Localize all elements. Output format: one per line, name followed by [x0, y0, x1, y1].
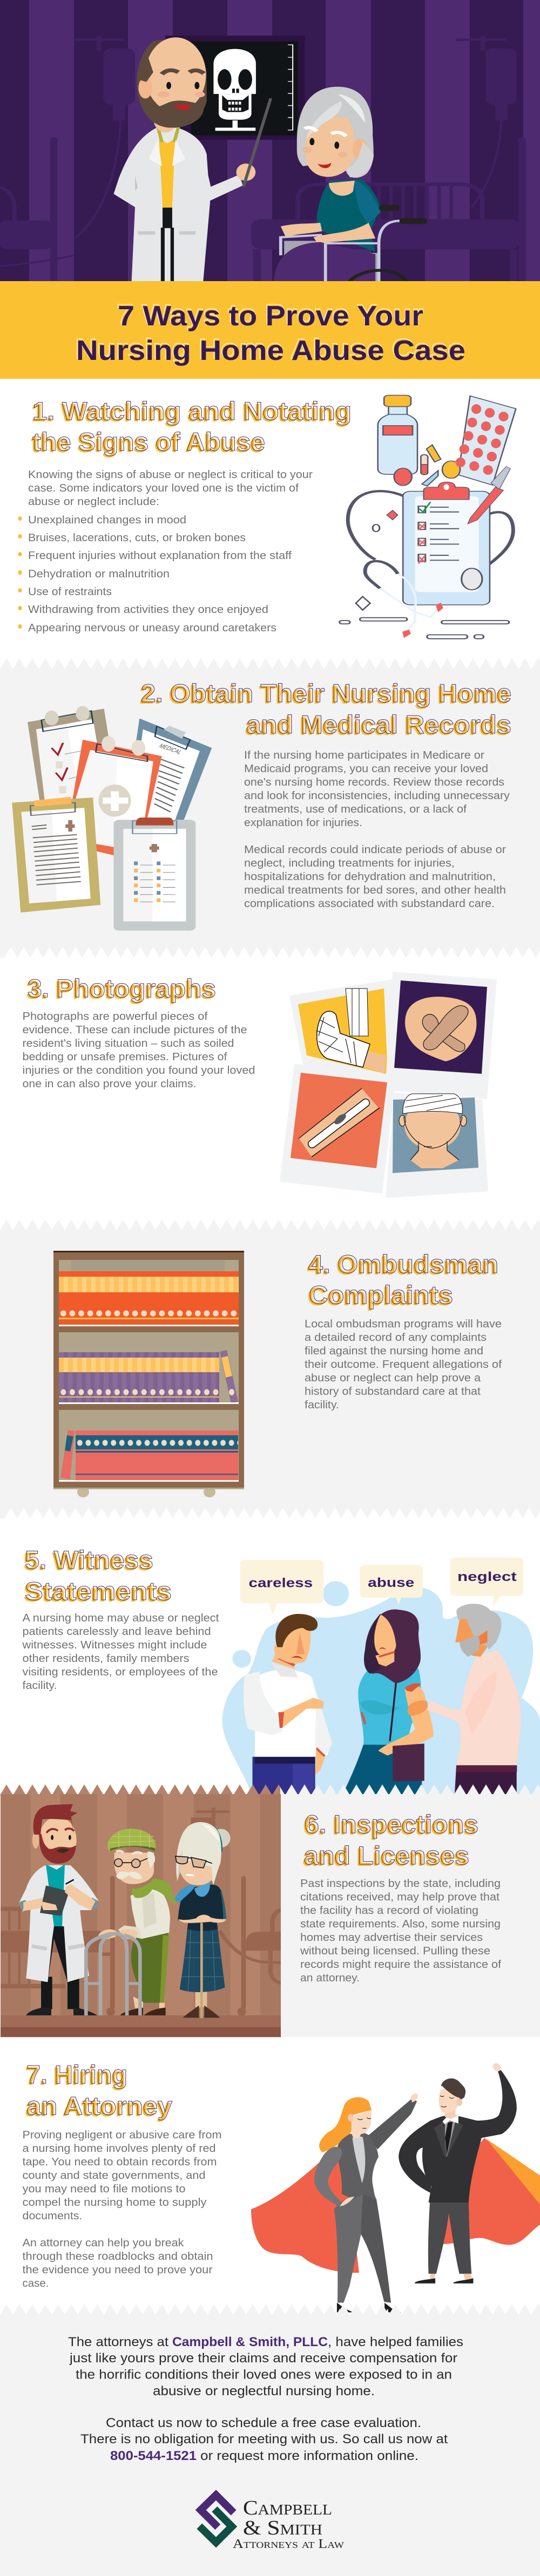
text: closing paragraph	[68, 2335, 463, 2398]
speech bubble: careless: careless	[248, 1576, 313, 1590]
elderly man with walker	[86, 1829, 176, 2015]
caped man attorney	[399, 2063, 540, 2284]
panel: closing section background	[0, 2304, 540, 2576]
text: section 3: Photographs are powerful pieces of	[23, 1010, 208, 1023]
heading: section 6: 6. Inspections	[305, 1810, 478, 1838]
panel: section 4 background	[0, 1219, 540, 1518]
text: section 4	[305, 1318, 502, 1411]
heading: section 1: the Signs of Abuse	[32, 427, 265, 456]
text: section 1 intro: abuse or neglect include:	[28, 495, 159, 508]
heading: section 1	[31, 397, 352, 458]
title banner	[0, 281, 540, 379]
illustration: medicine, clipboard, stethoscope	[340, 396, 516, 639]
text: section 4: a detailed record of any complaints	[305, 1331, 487, 1344]
illustration: bookshelf of records	[53, 1251, 244, 1497]
logo: Campbell & Smith: & Smith	[243, 2517, 322, 2539]
title banner: 7 Ways to Prove Your	[117, 299, 423, 330]
heading: section 1: the Signs of Abuse	[31, 429, 264, 458]
text: section 6: records might require the assistance of	[300, 1958, 501, 1971]
text: section 7: county and state governments, and	[23, 2169, 206, 2182]
speech bubble: neglect	[450, 1558, 523, 1606]
background bed silhouettes	[1, 1808, 281, 2016]
text: section 7: case.	[23, 2277, 49, 2289]
illustration: clipboards: MEDICAL	[157, 743, 184, 755]
text: section 5	[22, 1612, 219, 1692]
text: section 3: bedding or unsafe premises. Pictures of	[23, 1051, 227, 1063]
heading: section 4: 4. Ombudsman	[307, 1251, 497, 1280]
text: section 7: Proving negligent or abusive care from	[23, 2129, 221, 2141]
speech bubble: neglect: neglect	[457, 1570, 517, 1584]
heading: section 2: 2. Obtain Their Nursing Home	[141, 679, 511, 707]
text: section 7: the evidence you need to prove your	[23, 2264, 213, 2276]
text: call to action: or request more information online.	[200, 2449, 418, 2463]
title banner: Nursing Home Abuse Case	[75, 333, 464, 365]
text: call to action	[80, 2416, 448, 2463]
caped woman attorney	[251, 2094, 418, 2312]
heading: section 2: and Medical Records	[246, 710, 511, 739]
heading: section 3: 3. Photographs	[28, 974, 216, 1003]
elderly man witness	[408, 1604, 521, 1794]
text: section 6: state requirements. Also, some nursing	[300, 1918, 501, 1930]
text: section 1 intro	[28, 468, 313, 508]
heading: section 7: an Attorney	[25, 2093, 171, 2122]
heading: section 5	[23, 1545, 172, 1607]
text: section 2: one's nursing home records. Review those records	[244, 776, 504, 788]
text: section 2: If the nursing home participates in Medicare or	[244, 749, 484, 761]
text: section 2: complications associated with substandard care.	[244, 897, 495, 910]
elderly woman in wheelchair	[274, 87, 427, 281]
bullet list: signs of abuse: Appearing nervous or uneasy around caretakers	[28, 622, 276, 634]
heading: section 4: Complaints	[309, 1280, 453, 1309]
woman witness	[343, 1604, 501, 1794]
text: section 7: tape. You need to obtain records from	[23, 2156, 217, 2168]
heading: section 5: Statements	[23, 1578, 170, 1607]
heading: section 6	[302, 1810, 478, 1871]
text: section 5: facility.	[23, 1679, 57, 1692]
text: section 6: without being licensed. Pulling these	[300, 1945, 490, 1957]
hospital silhouettes background	[0, 36, 526, 281]
bullet list: signs of abuse: Unexplained changes in mood	[28, 514, 186, 526]
text: section 3: resident's living situation – such as soiled	[23, 1037, 234, 1050]
text: section 2: Medicaid programs, you can receive your loved	[244, 762, 488, 775]
illustration: attorney superheroes	[251, 2063, 540, 2312]
heading: section 4: 4. Ombudsman	[308, 1250, 498, 1278]
elderly woman with cane	[174, 1822, 231, 2018]
heading: section 4	[307, 1250, 498, 1311]
text: section 7	[23, 2129, 221, 2289]
panel: section 6 background	[280, 1784, 540, 2037]
text: call to action: Contact us now to schedule a free case evaluation.	[106, 2416, 421, 2430]
text: section 5: A nursing home may abuse or neglect	[23, 1612, 219, 1624]
text: section 5: visiting residents, or employees of the	[23, 1666, 218, 1678]
text: closing paragraph: Campbell & Smith, PLLC	[172, 2335, 328, 2349]
text: section 7: An attorney can help you break	[23, 2237, 184, 2249]
text: section 6	[300, 1877, 501, 1984]
text: section 2: neglect, including treatments for injuries,	[244, 857, 455, 869]
illustration: clipboards	[12, 706, 212, 931]
text: section 3: evidence. These can include pictures of the	[23, 1024, 247, 1036]
logo: Campbell & Smith: Attorneys at Law	[233, 2537, 345, 2551]
text: section 5: witnesses. Witnesses might include	[22, 1639, 207, 1651]
text: section 5: patients carelessly and leave behind	[23, 1625, 211, 1638]
text: section 4: filed against the nursing home and	[305, 1345, 483, 1357]
text: section 4: history of substandard care at that	[305, 1385, 481, 1398]
text: section 2: treatments, use of medications, or a lack of	[244, 803, 467, 815]
doctor with clipboard	[19, 1804, 99, 2015]
text: section 6: homes may advertise their services	[300, 1931, 483, 1944]
text: section 3: injuries or the condition you found your loved	[23, 1064, 255, 1076]
text: closing paragraph: , have helped families	[328, 2335, 463, 2349]
shelf 3	[59, 1410, 239, 1482]
x-ray board with skull	[165, 36, 305, 140]
doctor figure	[113, 37, 271, 281]
photo: bandaged arm	[289, 979, 400, 1079]
text: call to action: 800-544-1521	[110, 2449, 197, 2463]
title banner: 7 Ways to Prove Your	[118, 301, 423, 332]
heading: section 2: and Medical Records	[245, 712, 510, 740]
blue backdrop blob	[222, 1581, 540, 1794]
text: section 7: a nursing home involves plenty of red	[23, 2142, 216, 2155]
text: section 4: abuse or neglect can help prove a	[305, 1372, 481, 1384]
text: closing paragraph: the horrific conditions their loved ones were exposed to in an	[76, 2368, 452, 2382]
text: section 4: their outcome. Frequent allegations of	[305, 1358, 502, 1371]
illustration: injury photographs	[280, 972, 497, 1198]
text: section 6: the facility has a record of violating	[300, 1904, 478, 1917]
heading: section 7: an Attorney	[26, 2091, 172, 2120]
text: section 2: Medical records could indicate periods of abuse or	[244, 843, 506, 856]
heading: section 2: 2. Obtain Their Nursing Home	[139, 680, 510, 709]
illustration: three witnesses	[222, 1558, 540, 1794]
shelf 2	[59, 1332, 239, 1404]
text: section 3	[23, 1010, 255, 1090]
text: section 6: an attorney.	[300, 1972, 360, 1984]
bullet list: signs of abuse: Bruises, lacerations, cuts, or broken bones	[28, 531, 246, 544]
text: section 4: Local ombudsman programs will have	[305, 1318, 502, 1330]
heading: section 1: 1. Watching and Notating	[31, 398, 350, 427]
photo: bandage on skin	[385, 972, 497, 1099]
photo: bandaged head	[386, 1093, 488, 1198]
heading: section 6: and Licenses	[304, 1841, 469, 1870]
bullet list: signs of abuse: Use of restraints	[28, 585, 112, 598]
text: closing paragraph: just like yours prove their claims and receive compensation for	[69, 2351, 457, 2366]
heading: section 7: 7. Hiring	[25, 2062, 126, 2090]
hero illustration panel	[0, 0, 540, 281]
text: section 4: facility.	[305, 1399, 339, 1411]
text: closing paragraph: The attorneys at	[68, 2335, 168, 2349]
shelf 1	[59, 1260, 239, 1326]
heading: section 3: 3. Photographs	[26, 976, 214, 1004]
bullet list: signs of abuse	[18, 514, 292, 634]
speech bubble: abuse	[360, 1565, 423, 1605]
man witness	[244, 1614, 332, 1794]
text: section 1 intro: case. Some indicators your loved one is the victim of	[28, 482, 299, 494]
speech bubble: careless	[240, 1560, 324, 1614]
text: section 2	[244, 749, 510, 910]
logo: Campbell & Smith	[199, 2495, 345, 2551]
illustration panel: doctor with elderly residents	[0, 1784, 281, 2037]
heading: section 5: 5. Witness	[23, 1547, 152, 1576]
heading: section 4: Complaints	[307, 1282, 451, 1311]
bullet list: signs of abuse: Frequent injuries without explanation from the staff	[28, 549, 292, 562]
text: closing paragraph: abusive or neglectful nursing home.	[153, 2384, 375, 2398]
title banner: Nursing Home Abuse Case	[76, 335, 465, 366]
bullet list: signs of abuse: Dehydration or malnutrition	[28, 568, 170, 580]
text: call to action: There is no obligation for meeting with us. So call us now at	[80, 2432, 448, 2446]
text: section 7: you may need to file motions to	[23, 2183, 186, 2195]
text: section 5: other residents, family members	[23, 1652, 189, 1665]
text: section 7: through these roadblocks and obtain	[23, 2250, 213, 2262]
text: section 7: documents.	[23, 2210, 82, 2222]
text: section 2: explanation for injuries.	[244, 816, 362, 829]
heading: section 7: 7. Hiring	[26, 2060, 127, 2089]
photo: broken bone	[280, 1064, 396, 1194]
text: section 6: citations received, may help prove that	[300, 1891, 500, 1903]
speech bubble: abuse: abuse	[368, 1576, 414, 1590]
text: section 6: Past inspections by the state, including	[300, 1877, 501, 1890]
text: section 7: compel the nursing home to supply	[23, 2196, 207, 2209]
text: section 2: medical treatments for bed sores, and other health	[244, 884, 506, 896]
text: section 1 intro: Knowing the signs of abuse or neglect is critical to your	[28, 468, 313, 481]
heading: section 5: 5. Witness	[25, 1545, 153, 1574]
logo: Campbell & Smith: Campbell	[243, 2497, 332, 2519]
text: section 2: and look for inconsistencies, including unnecessary	[244, 789, 510, 802]
heading: section 6: and Licenses	[302, 1843, 468, 1871]
bullet list: signs of abuse: Withdrawing from activities they once enjoyed	[28, 603, 268, 616]
heading: section 2	[139, 679, 511, 740]
heading: section 5: Statements	[25, 1577, 172, 1605]
text: section 2: hospitalizations for dehydration and malnutrition,	[244, 870, 496, 883]
heading: section 7	[25, 2060, 172, 2122]
heading: section 1: 1. Watching and Notating	[32, 397, 352, 425]
heading: section 6: 6. Inspections	[303, 1811, 477, 1840]
panel: section 2 background	[0, 658, 540, 958]
text: section 3: one in can also prove your claims.	[23, 1078, 197, 1090]
